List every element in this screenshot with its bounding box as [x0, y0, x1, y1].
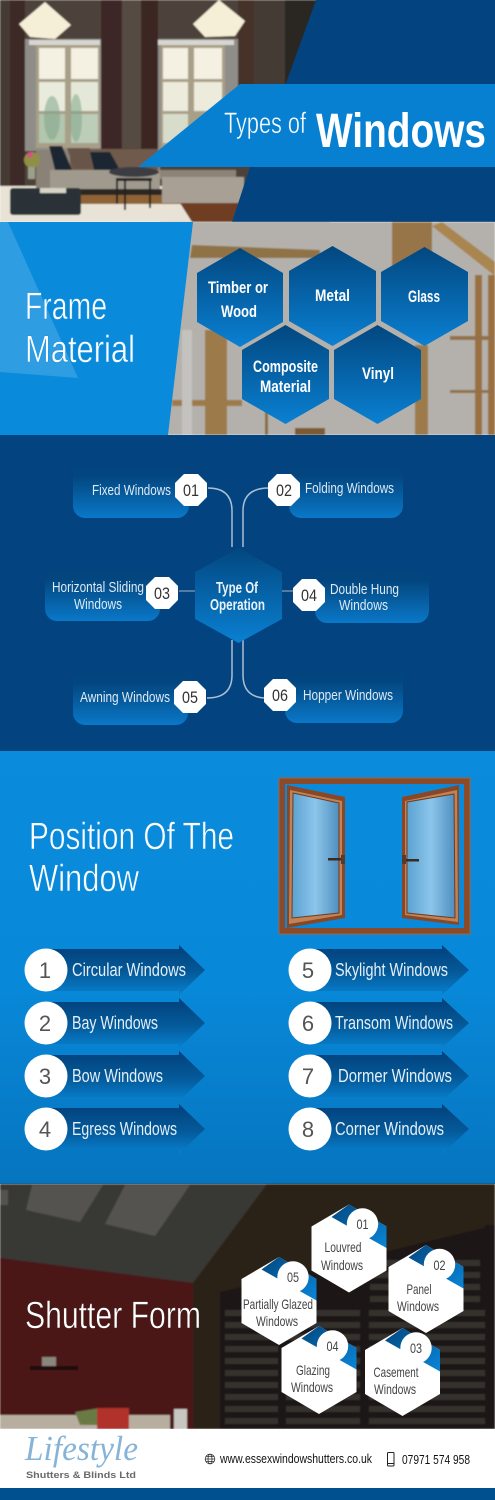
hexagon 02: panel windows: 02: [434, 1257, 446, 1273]
hexagon 01: louvred windows: [312, 1204, 386, 1292]
list item 8: 8: [302, 1117, 314, 1142]
hexagon: composite material: Composite: [253, 357, 318, 376]
phone number: 07971 574 958: [402, 1452, 470, 1467]
item 05: [73, 669, 206, 725]
hexagon 03: casement windows: 03: [410, 1340, 422, 1356]
hexagon 04: glazing windows: Windows: [291, 1379, 333, 1395]
list item 2: [24, 998, 205, 1048]
list item 6: 6: [302, 1011, 314, 1036]
panel: hero: [0, 0, 495, 222]
item 04: Double Hung: [330, 581, 399, 598]
list item 6: Transom Windows: [335, 1013, 453, 1033]
hexagon 05: partially glazed windows: 05: [287, 1269, 299, 1285]
item 05: Awning Windows: [80, 689, 170, 706]
item 03: Windows: [74, 596, 122, 613]
list item 7: 7: [302, 1064, 314, 1089]
left sash: [287, 785, 345, 928]
panel: footer: [0, 1429, 495, 1500]
item 02: [268, 462, 403, 518]
panel: type of operation: [0, 435, 495, 751]
hexagon 05: partially glazed windows: Windows: [256, 1313, 298, 1329]
panel: frame material: [0, 222, 495, 435]
connector lines: [179, 488, 295, 698]
ottoman: [10, 188, 81, 215]
dark blue panel: [232, 0, 495, 222]
hexagon: metal: [289, 246, 376, 346]
list item 4: Egress Windows: [72, 1119, 177, 1139]
hexagon 01: louvred windows: 01: [356, 1216, 369, 1232]
item 03: 03: [154, 584, 170, 603]
list item 1: 1: [39, 958, 51, 983]
hexagon 02: panel windows: [388, 1245, 464, 1333]
hexagon: timber or wood: [197, 248, 283, 347]
list item 2: 2: [39, 1011, 51, 1036]
item 03: Horizontal Sliding: [52, 579, 144, 596]
central hexagon: Operation: [210, 597, 265, 614]
website: www.essexwindowshutters.co.uk: [219, 1451, 372, 1466]
background photo: room with shutters: [0, 1184, 495, 1429]
list item 5: 5: [302, 958, 314, 983]
blue title panel: [0, 222, 193, 435]
list item 3: 3: [39, 1064, 51, 1089]
hexagon 03: casement windows: Casement: [374, 1364, 419, 1380]
hexagon 05: partially glazed windows: Partially Glazed: [243, 1296, 313, 1312]
hexagon: vinyl: [334, 325, 421, 424]
list item 3: Bow Windows: [72, 1066, 163, 1086]
list item 1: Circular Windows: [72, 960, 186, 980]
list item 7: [288, 1051, 469, 1101]
item 06: [264, 667, 403, 723]
right sash: [402, 785, 459, 925]
heading: frame material: Material: [25, 329, 135, 371]
floor: [0, 186, 200, 222]
panel: position of the window: [0, 751, 495, 1184]
list item 2: Bay Windows: [72, 1013, 158, 1033]
lighter triangle: [0, 222, 78, 378]
hexagon 03: casement windows: [365, 1328, 440, 1416]
item 06: Hopper Windows: [303, 687, 393, 704]
item 06: 06: [272, 686, 288, 705]
list item 8: Corner Windows: [335, 1119, 444, 1139]
item 03: [45, 565, 178, 621]
hexagon 01: louvred windows: Windows: [321, 1257, 363, 1273]
hexagon 03: casement windows: Windows: [374, 1381, 416, 1397]
heading: frame material: [25, 286, 135, 371]
flowers: [24, 152, 40, 168]
central hexagon: Type Of: [216, 580, 259, 597]
title band: [138, 84, 495, 167]
background photo: wooden frames: [160, 222, 495, 435]
coffee table: [109, 167, 159, 177]
item 04: [293, 567, 429, 623]
hexagon: glass: [381, 247, 468, 346]
list item 6: [288, 998, 469, 1048]
title: Types of: [224, 107, 306, 140]
hexagon: timber or wood: Timber or: [208, 278, 268, 297]
item 05: 05: [182, 688, 198, 707]
logo: Lifestyle: [24, 1429, 138, 1468]
list item 8: [288, 1104, 469, 1154]
hexagon 04: glazing windows: [282, 1326, 356, 1414]
list item 3: [24, 1051, 205, 1101]
list item 4: [24, 1104, 205, 1154]
heading: shutter form: Shutter Form: [25, 1295, 201, 1337]
hexagon 02: panel windows: Panel: [406, 1281, 432, 1297]
title: [224, 105, 486, 158]
hexagon: timber or wood: Wood: [221, 302, 257, 321]
item 01: [73, 462, 207, 518]
item 02: Folding Windows: [305, 480, 394, 497]
hero photo: living room: [0, 0, 330, 222]
icon: phone: [388, 1452, 394, 1466]
list item 5: [288, 945, 469, 995]
hexagon 04: glazing windows: 04: [326, 1338, 339, 1354]
hexagon: glass: Glass: [408, 287, 440, 306]
footer bar: [0, 1488, 495, 1500]
icon: open window: [279, 778, 470, 934]
heading: position of the window: Position Of The: [29, 816, 234, 858]
list item 7: Dormer Windows: [338, 1066, 452, 1086]
list item 4: 4: [39, 1117, 51, 1142]
panel: shutter form: [0, 1184, 495, 1429]
hexagon 01: louvred windows: Louvred: [324, 1239, 362, 1255]
sofa: [36, 150, 160, 192]
lamps: [19, 2, 71, 39]
list item 5: Skylight Windows: [335, 960, 448, 980]
icon: globe: [205, 1454, 215, 1464]
heading: position of the window: Window: [29, 858, 139, 900]
hexagon: composite material: [242, 325, 329, 424]
item 04: 04: [301, 586, 317, 605]
hexagon: metal: Metal: [315, 286, 350, 305]
logo: Shutters & Blinds Ltd: [26, 1470, 136, 1480]
hexagon 04: glazing windows: Glazing: [296, 1362, 330, 1378]
heading: frame material: Frame: [25, 286, 107, 328]
item 01: Fixed Windows: [92, 482, 171, 499]
list item 1: [24, 945, 205, 995]
hexagon: composite material: Material: [260, 377, 311, 396]
central hexagon: [195, 548, 282, 643]
heading: position of the window: [29, 816, 234, 900]
item 02: 02: [276, 481, 292, 500]
item 04: Windows: [339, 597, 388, 614]
hexagon 05: partially glazed windows: [242, 1257, 316, 1345]
hexagon: vinyl: Vinyl: [362, 364, 394, 383]
item 01: 01: [183, 481, 199, 500]
hexagon 02: panel windows: Windows: [397, 1298, 439, 1314]
